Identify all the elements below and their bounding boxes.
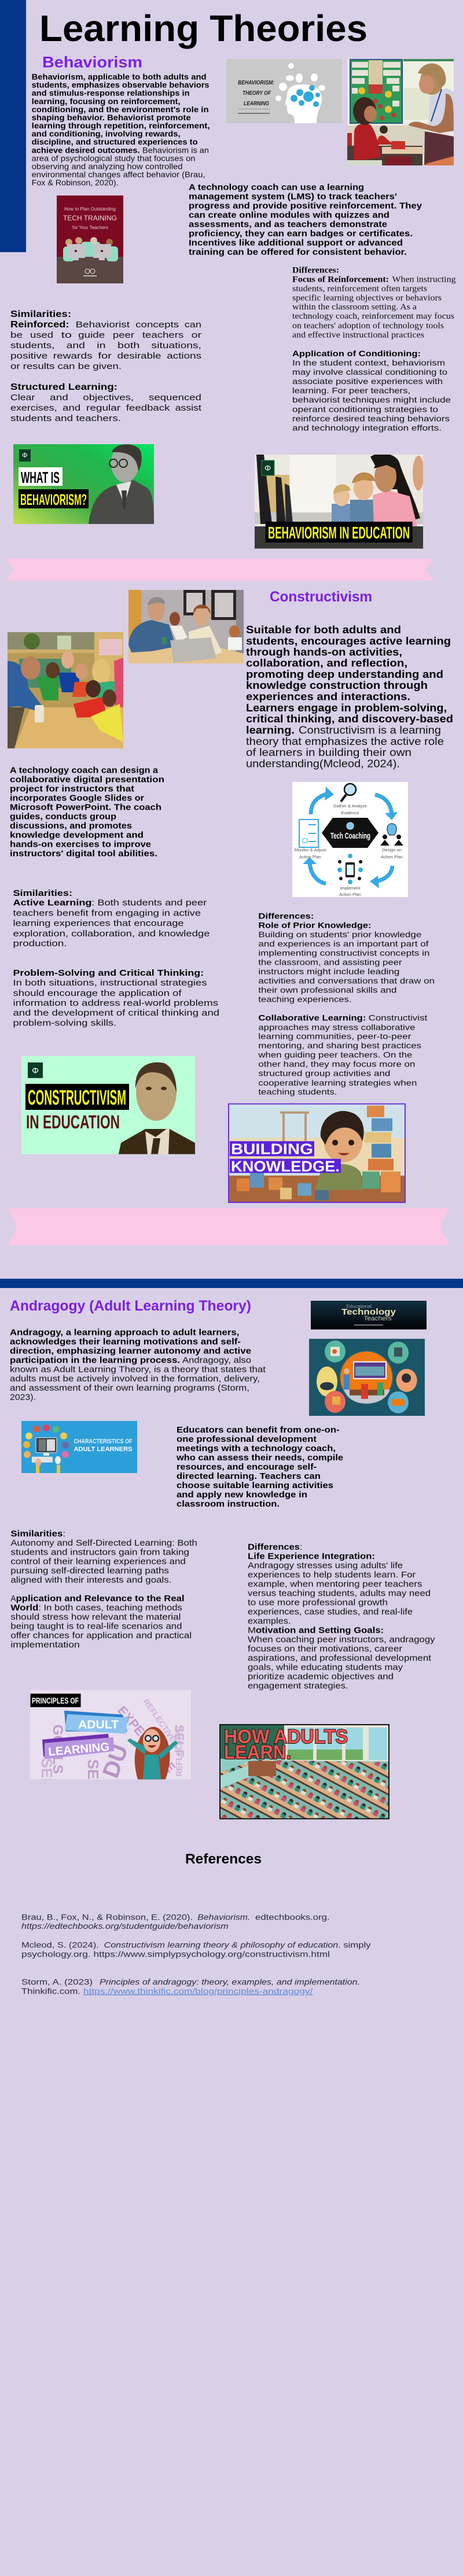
text block: andragogy definition: adults must be actively involved in the formation, delivery, xyxy=(10,1374,260,1383)
diagram: tech coaching cycle xyxy=(292,782,408,897)
text block: behaviorism differences: students, reinforcement often targets xyxy=(292,284,427,293)
text block: andragogy differences: : xyxy=(300,1542,302,1552)
text block: collaborative digital presentation: guides, conducts group xyxy=(10,812,116,822)
text block: andragogy differences: versus teaching students, adults may need xyxy=(248,1589,431,1599)
image: children with teacher at table xyxy=(8,632,123,748)
text block: andragogy differences: examples. xyxy=(248,1617,291,1626)
image: building knowledge xyxy=(228,1104,406,1203)
text block: constructivism similarities: and the development of critical thinking and xyxy=(13,1008,219,1018)
text block: constructivism differences: Role of Prior Knowledge: xyxy=(258,921,371,930)
text block: technology coach LMS: can create online modules with quizzes and xyxy=(189,211,389,220)
image: how adults learn: HOW ADULTS xyxy=(224,1726,348,1748)
text block: constructivism differences: structured group activities and xyxy=(258,1069,390,1078)
image: principles of adult learning: SELF-D xyxy=(84,1759,102,1814)
image: principles of adult learning: REFLECTIVE xyxy=(142,1697,178,1744)
text block: one-on-one professional development: meetings with a technology coach, xyxy=(177,1444,336,1453)
text block: behaviorism differences: When instructing xyxy=(392,275,456,284)
text block: constructivism differences: Constructivist xyxy=(369,1013,427,1023)
text block: behaviorism differences: technology coach, reinforcement may focus xyxy=(292,312,454,321)
text block: behaviorism similarities: used xyxy=(30,330,53,340)
text block: behaviorism definition: Behaviorism is an xyxy=(142,146,209,155)
text block: andragogy definition: participation in the learning process. xyxy=(10,1355,180,1365)
text block: behaviorism definition: achieve desired outcomes. xyxy=(32,146,140,155)
text block: suitable for both adults and students: Learners engage in problem-solving, xyxy=(246,702,447,714)
text block: andragogy definition: acknowledges their learning motivations and self- xyxy=(10,1337,241,1346)
diagram: tech coaching cycle: Action Plan xyxy=(381,854,403,859)
text block: behaviorism similarities: guide xyxy=(78,330,105,340)
text block: constructivism similarities: : Both students and peer xyxy=(91,898,207,908)
text block: collaborative digital presentation: discussions, and promotes xyxy=(10,821,132,831)
image: what is behaviorism: WHAT IS xyxy=(21,468,60,486)
text block: behaviorism differences: Focus of Reinforcement: xyxy=(292,275,389,284)
text block: behaviorism differences: operant conditioning strategies to xyxy=(292,404,438,414)
text block: behaviorism similarities: rewards xyxy=(53,351,93,361)
text block: reference list: . simply xyxy=(338,1940,371,1950)
heading: References: References xyxy=(185,1851,262,1867)
text block: collaborative digital presentation: project for instructors that xyxy=(10,784,134,794)
image: principles of adult learning: DU xyxy=(98,1741,133,1781)
image: what is behaviorism: Φ xyxy=(22,451,28,459)
text block: reference list: psychology.org. https://www.simplypsychology.org/constructivism.html xyxy=(21,1950,330,1959)
text block: andragogy similarities: offer chances for application and practical xyxy=(10,1631,192,1641)
text block: suitable for both adults and students: critical thinking, and discovery-based xyxy=(246,713,453,725)
text block: collaborative digital presentation: collaborative digital presentation xyxy=(10,775,164,785)
text block: reference list: https://edtechbooks.org/studentguide/behaviorism xyxy=(21,1921,229,1931)
text block: andragogy differences: M xyxy=(248,1626,256,1636)
image: principles of adult learning: PRINCIPLES OF xyxy=(32,1696,79,1706)
diagram: tech coaching cycle: Evidence xyxy=(341,810,359,815)
image: tech training book cover: TECH TRAINING xyxy=(63,214,117,222)
text block: behaviorism similarities: for xyxy=(98,351,112,361)
image: what is behaviorism xyxy=(13,444,154,524)
text block: behaviorism similarities: and xyxy=(63,403,80,413)
text block: constructivism differences: and experiences is an important part of xyxy=(258,939,429,949)
text block: reference list: Principles of andragogy: theory, examples, and implementation. xyxy=(100,1977,360,1986)
image: characteristics of adult learners: ADULT LEARNERS xyxy=(74,1446,132,1453)
image: constructivism in education: Φ xyxy=(32,1066,39,1076)
text block: technology coach LMS: proficiency, they can earn badges or certificates. xyxy=(189,229,413,239)
text block: constructivism similarities: should encourage the application of xyxy=(13,988,182,998)
text block: collaborative digital presentation xyxy=(10,766,164,859)
text block: behaviorism definition: and stimulus-response relationships in xyxy=(32,88,190,97)
image: educational technology illustration xyxy=(309,1338,425,1416)
text block: behaviorism similarities: both xyxy=(117,341,139,350)
heading: Behaviorism: Behaviorism xyxy=(42,54,142,71)
text block: reference list: Storm, A. (2023) xyxy=(21,1977,93,1986)
text block: constructivism differences: activities and conversations that draw on xyxy=(258,976,435,985)
text block: andragogy definition: Andragogy, a learning approach to adult learners, xyxy=(10,1327,239,1337)
image: behaviorism in education xyxy=(255,455,423,548)
text block: behaviorism similarities: students, xyxy=(10,341,54,350)
text block: behaviorism similarities: exercises, xyxy=(10,403,57,413)
text block: andragogy similarities: : In both cases, teaching methods xyxy=(38,1603,182,1613)
text block: behaviorism similarities: be xyxy=(10,330,23,340)
text block: constructivism differences: learning communities, peer-to-peer xyxy=(258,1031,411,1040)
text block: constructivism differences: Collaborative Learning: xyxy=(258,1013,366,1023)
image: principles of adult learning: SELF xyxy=(172,1725,186,1757)
text block: andragogy similarities: being taught is to real-life scenarios and xyxy=(10,1622,182,1632)
text block: behaviorism similarities: regular xyxy=(86,403,120,413)
text block: constructivism similarities: exploration, collaboration, and knowledge xyxy=(13,929,210,939)
text block: andragogy definition: 2023). xyxy=(10,1392,36,1402)
text block: suitable for both adults and students: experiences and interactions. xyxy=(246,691,410,703)
text block: andragogy similarities: implementation xyxy=(10,1640,80,1650)
title: Learning Theories xyxy=(39,8,368,49)
diagram: tech coaching cycle: Action Plan xyxy=(339,892,361,897)
text block: constructivism differences xyxy=(258,911,435,1096)
image: constructivism in education: IN EDUCATION xyxy=(26,1112,120,1132)
text block: behaviorism similarities: Reinforced: xyxy=(10,320,69,330)
text block: one-on-one professional development: classroom instruction. xyxy=(177,1499,280,1509)
text block: suitable for both adults and students: learning. xyxy=(246,725,295,736)
text block: constructivism similarities: problem-solving skills. xyxy=(13,1018,116,1028)
image: principles of adult learning: GOALS xyxy=(50,1725,65,1774)
text block: technology coach LMS: A technology coach can use a learning xyxy=(189,183,364,193)
text block: behaviorism differences: and technology integration efforts. xyxy=(292,423,442,433)
image: characteristics of adult learners xyxy=(21,1420,137,1473)
text block: behaviorism differences: associate positive experiences with xyxy=(292,377,443,386)
text block: suitable for both adults and students: through hands-on activities, xyxy=(246,647,402,658)
text block: constructivism similarities: Active Learning xyxy=(13,898,91,908)
text block: reference list: https://www.thinkific.com/blog/principles-andragogy/ xyxy=(83,1986,313,1995)
text block: behaviorism definition: area of psychological study that focuses on xyxy=(32,154,196,163)
text block: constructivism similarities: information to address real-world problems xyxy=(13,998,218,1008)
text block: andragogy similarities: : xyxy=(63,1529,65,1539)
text block: behaviorism definition: learning, focusing on reinforcement, xyxy=(32,97,181,106)
image: principles of adult learning: ADULT xyxy=(78,1719,119,1732)
text block: behaviorism definition: Behaviorism, applicable to both adults and xyxy=(32,72,207,81)
text block: constructivism differences: Differences: xyxy=(258,911,314,920)
text block: andragogy differences: otivation and Setting Goals: xyxy=(256,1626,384,1636)
text block: behaviorism similarities: situations, xyxy=(152,341,201,350)
blue divider band xyxy=(0,1279,463,1288)
text block: constructivism similarities: Similarities: xyxy=(13,888,72,898)
text block: one-on-one professional development xyxy=(176,1425,343,1509)
text block: constructivism differences: instructors might include leading xyxy=(258,966,399,976)
heading: Andragogy: Andragogy (Adult Learning Theory) xyxy=(10,1298,251,1314)
text block: behaviorism differences: In the student context, behaviorism xyxy=(292,358,445,367)
text block: behaviorism differences: learning. For peer teachers, xyxy=(292,386,410,395)
text block: behaviorism differences: Differences: xyxy=(292,266,339,275)
text block: collaborative digital presentation: Microsoft PowerPoint. The coach xyxy=(10,803,161,813)
text block: behaviorism similarities xyxy=(10,309,202,423)
text block: andragogy similarities: A xyxy=(10,1594,16,1604)
image: how adults learn xyxy=(219,1724,389,1820)
ribbon banner 1 xyxy=(6,559,434,581)
diagram: tech coaching cycle: Monitor & Adjust xyxy=(295,847,326,852)
text block: one-on-one professional development: and apply new knowledge in xyxy=(177,1490,307,1500)
text block: behaviorism similarities: actions xyxy=(167,351,201,361)
text block: suitable for both adults and students: knowledge construction through xyxy=(246,680,428,691)
text block: suitable for both adults and students: theory that emphasizes the active role xyxy=(246,736,444,747)
text block: andragogy differences: aspirations, and professional development xyxy=(248,1654,432,1663)
text block: one-on-one professional development: directed learning. Teachers can xyxy=(177,1471,321,1481)
text block: andragogy similarities xyxy=(10,1529,197,1650)
image: principles of adult learning: SELF xyxy=(38,1758,56,1796)
text block: collaborative digital presentation: A technology coach can design a xyxy=(10,766,159,776)
text block: andragogy similarities: students and instructors gain from taking xyxy=(10,1548,189,1558)
image: how adults learn: LEARN. xyxy=(224,1741,291,1763)
text block: andragogy differences xyxy=(248,1542,435,1691)
text block: behaviorism differences: on teachers' adoption of technology tools xyxy=(292,321,444,330)
text block: behaviorism differences xyxy=(292,266,456,433)
text block: andragogy similarities: pursuing self-directed learning paths xyxy=(10,1566,169,1576)
text block: behaviorism differences: behaviorist techniques might include xyxy=(292,395,451,404)
text block: behaviorism similarities: students and teachers. xyxy=(10,414,121,423)
diagram: tech coaching cycle: Tech Coaching xyxy=(330,831,370,841)
text block: constructivism differences: when guiding peer teachers. On the xyxy=(258,1050,413,1060)
text block: behaviorism similarities: Clear xyxy=(10,393,35,403)
text block: andragogy similarities: control of their learning experiences and xyxy=(10,1557,186,1567)
text block: behaviorism similarities: objectives, xyxy=(83,393,134,403)
text block: andragogy definition: Andragogy, also xyxy=(182,1355,251,1365)
image: building knowledge: KNOWLEDGE. xyxy=(231,1158,340,1175)
text block: andragogy differences: When coaching peer instructors, andragogy xyxy=(248,1635,435,1645)
image: behaviorism theory of learning xyxy=(226,59,342,123)
text block: constructivism differences: their own professional skills and xyxy=(258,986,396,995)
text block: andragogy differences: to use more professional growth xyxy=(248,1598,388,1608)
image: behaviorism theory of learning: LEARNING xyxy=(244,101,269,107)
text block: behaviorism similarities: Similarities: xyxy=(10,309,71,319)
text block: reference list: Behaviorism. xyxy=(197,1912,250,1921)
text block: suitable for both adults and students: Constructivism is a learning xyxy=(299,725,441,736)
image: educational technology for teachers: Educational xyxy=(346,1304,372,1309)
text block: andragogy similarities: Autonomy and Self-Directed Learning: Both xyxy=(10,1538,197,1548)
image: principles of adult learning: LEARNING xyxy=(48,1741,110,1759)
text block: behaviorism similarities: and xyxy=(50,393,68,403)
text block: behaviorism definition: learning through repetition, reinforcement, xyxy=(32,121,210,130)
text block: suitable for both adults and students: understanding(Mcleod, 2024). xyxy=(246,758,400,769)
text block: technology coach LMS: Incentives like additional support or advanced xyxy=(189,238,403,248)
text block: reference list xyxy=(21,1912,371,1995)
left blue bar xyxy=(0,0,26,252)
diagram: tech coaching cycle: Action Plan xyxy=(299,854,321,859)
image: behaviorism in education: Φ xyxy=(264,463,271,473)
text block: behaviorism similarities: sequenced xyxy=(149,393,201,403)
image: teacher and student in classroom xyxy=(347,59,454,165)
text block: constructivism similarities: production. xyxy=(13,939,67,949)
text block: andragogy similarities: Similarities xyxy=(10,1529,63,1539)
text block: constructivism differences: approaches may stress collaborative xyxy=(258,1023,416,1032)
text block: constructivism differences: other hand, they may focus more on xyxy=(258,1060,415,1069)
text block: technology coach LMS: management system (LMS) to track teachers' xyxy=(189,192,397,202)
text block: behaviorism differences: specific learning objectives or behaviors xyxy=(292,293,442,302)
text block: constructivism differences: Building on students' prior knowledge xyxy=(258,930,422,939)
text block: andragogy similarities: pplication and Relevance to the Real xyxy=(16,1594,185,1604)
text block: constructivism differences: teaching students. xyxy=(258,1087,337,1096)
text block: one-on-one professional development: who can assess their needs, compile xyxy=(176,1453,343,1463)
text block: andragogy differences: focuses on their motivations, career xyxy=(248,1644,402,1654)
text block: behaviorism definition: students, emphasizes observable behaviors xyxy=(32,80,210,89)
text block: one-on-one professional development: choose suitable learning activities xyxy=(177,1481,333,1490)
image: tech training book cover xyxy=(57,195,123,283)
text block: andragogy definition: known as Adult Learning Theory, is a theory that states that xyxy=(10,1364,266,1374)
text block: behaviorism differences: Application of Conditioning: xyxy=(292,349,421,358)
text block: constructivism similarities: teachers benefit from engaging in active xyxy=(13,908,201,918)
text block: andragogy differences: goals, while educating students may xyxy=(248,1663,403,1673)
image: tech training book cover: How to Plan Outstanding xyxy=(64,206,116,212)
text block: behaviorism definition: Fox & Robinson, 2020). xyxy=(32,178,119,187)
text block: collaborative digital presentation: hands-on exercises to improve xyxy=(10,840,151,850)
text block: andragogy differences: engagement strategies. xyxy=(248,1681,348,1691)
text block: behaviorism similarities: positive xyxy=(10,351,47,361)
text block: suitable for both adults and students: of learners in building their own xyxy=(246,747,411,758)
text block: reference list: Thinkific.com. xyxy=(21,1986,80,1995)
text block: andragogy similarities: aligned with their interests and goals. xyxy=(10,1575,171,1585)
text block: behaviorism similarities: or xyxy=(192,330,201,340)
text block: behaviorism similarities: peer xyxy=(113,330,134,340)
text block: behaviorism similarities: concepts xyxy=(135,320,179,330)
text block: one-on-one professional development: Educators can benefit from one-on- xyxy=(177,1425,340,1435)
text block: suitable for both adults and students: collaboration, and reflection, xyxy=(246,658,407,669)
image: building knowledge: BUILDING xyxy=(231,1141,313,1158)
image: behaviorism theory of learning: BEHAVIORISM: xyxy=(238,80,274,86)
text block: technology coach LMS: progress and provide positive reinforcement. They xyxy=(189,201,422,211)
text block: andragogy definition xyxy=(10,1327,266,1402)
heading: Constructivism: Constructivism xyxy=(270,589,372,605)
image: principles of adult learning: EXPERIENCE xyxy=(115,1703,178,1776)
text block: constructivism differences: implementing constructivist concepts in xyxy=(258,949,429,958)
image: principles of adult learning xyxy=(30,1690,191,1814)
text block: constructivism similarities: In both situations, instructional strategies xyxy=(13,978,207,988)
text block: constructivism similarities: Problem-Solving and Critical Thinking: xyxy=(13,968,204,978)
text block: andragogy definition: direction, emphasizing learner autonomy and active xyxy=(10,1346,251,1356)
text block: one-on-one professional development: one professional development xyxy=(177,1434,317,1444)
text block: suitable for both adults and students: students, encourages active learning xyxy=(246,635,451,647)
image: tech training book cover: for Your Teachers xyxy=(72,225,108,230)
text block: behaviorism similarities: to xyxy=(61,330,72,340)
text block: behaviorism similarities: feedback xyxy=(126,403,170,413)
text block: constructivism differences: the classroom, and assisting peer xyxy=(258,958,402,967)
text block: one-on-one professional development: resources, and encourage self- xyxy=(177,1462,317,1472)
text block: collaborative digital presentation: incorporates Google Slides or xyxy=(10,794,144,803)
text block: reference list: edtechbooks.org. xyxy=(255,1912,330,1921)
text block: behaviorism definition xyxy=(32,72,210,187)
text block: constructivism differences: teaching experiences. xyxy=(258,995,351,1004)
text block: andragogy differences: Life Experience Integration: xyxy=(248,1552,375,1562)
image: educational technology for teachers: Technology xyxy=(341,1307,396,1317)
image: behaviorism theory of learning: THEORY OF xyxy=(242,90,271,97)
text block: suitable for both adults and students: promoting deep understanding and xyxy=(246,669,443,680)
text block: behaviorism differences: may involve classical conditioning to xyxy=(292,367,447,377)
text block: behaviorism similarities: in xyxy=(97,341,106,350)
text block: technology coach LMS: training can be offered for consistent behavior. xyxy=(189,248,407,257)
text block: constructivism differences: cooperative learning strategies when xyxy=(258,1078,417,1087)
text block: behaviorism differences: within the classroom setting. As a xyxy=(292,302,417,312)
text block: collaborative digital presentation: instructors' digital tool abilities. xyxy=(10,849,157,859)
text block: behaviorism similarities: or results can be given. xyxy=(10,361,122,371)
text block: behaviorism definition: discipline, and structured experiences to xyxy=(32,137,198,146)
text block: suitable for both adults and students: Suitable for both adults and xyxy=(246,624,401,636)
text block: behaviorism similarities: teachers xyxy=(142,330,183,340)
text block: behaviorism similarities: and xyxy=(67,341,85,350)
text block: behaviorism definition: observing and analyzing how controlled xyxy=(32,162,183,171)
text block: reference list: Constructivism learning theory & philosophy of education xyxy=(104,1940,338,1950)
text block: behaviorism definition: environmental changes affect behavior (Brau, xyxy=(32,170,205,179)
image: principles of adult learning: REFLECTIVE xyxy=(174,1726,183,1777)
text block: constructivism similarities: learning experiences that encourage xyxy=(13,918,184,928)
ribbon banner 2 xyxy=(8,1208,449,1245)
text block: andragogy differences: prioritize academic objectives and xyxy=(248,1672,394,1682)
text block: andragogy similarities: should stress how relevant the material xyxy=(10,1612,181,1622)
text block: andragogy differences: experiences to help students learn. For xyxy=(248,1570,416,1580)
text block: behaviorism definition: and conditioning, involving rewards, xyxy=(32,129,181,138)
text block: behaviorism similarities: Behaviorist xyxy=(76,320,130,330)
text block: behaviorism definition: shaping behavior. Behaviorist promote xyxy=(32,113,191,122)
text block: behaviorism similarities: assist xyxy=(175,403,202,413)
diagram: tech coaching cycle: Gather & Analyze xyxy=(333,803,367,809)
image: constructivism in education xyxy=(21,1056,195,1154)
text block: behaviorism differences: and effective instructional practices xyxy=(292,330,424,339)
text block: behaviorism similarities: desirable xyxy=(117,351,161,361)
image: educational technology for teachers: Teachers xyxy=(364,1315,392,1322)
text block: technology coach LMS xyxy=(189,183,422,257)
text block: reference list: Brau, B., Fox, N., & Robinson, E. (2020). xyxy=(21,1912,193,1921)
text block: behaviorism similarities: can xyxy=(185,320,201,330)
text block: andragogy definition: and assessment of their own learning programs (Storm, xyxy=(10,1383,249,1393)
diagram: tech coaching cycle: Design an xyxy=(382,847,402,852)
text block: andragogy differences: Differences xyxy=(248,1542,300,1552)
image: what is behaviorism: BEHAVIORISM? xyxy=(20,491,87,508)
text block: andragogy differences: example, when mentoring peer teachers xyxy=(248,1579,422,1589)
text block: reference list: Mcleod, S. (2024). xyxy=(21,1940,99,1950)
image: educational technology for teachers xyxy=(311,1301,427,1330)
text block: behaviorism differences: reinforce desired teaching behaviors xyxy=(292,414,450,423)
text block: andragogy differences: Andragogy stresses using adults' life xyxy=(248,1561,403,1571)
text block: behaviorism definition: conditioning, and the environment's role in xyxy=(32,105,209,114)
diagram: tech coaching cycle: Implement xyxy=(340,885,361,891)
text block: andragogy similarities: World xyxy=(10,1603,38,1613)
text block: constructivism similarities xyxy=(13,888,219,1028)
text block: behaviorism similarities: Structured Learning: xyxy=(10,382,117,392)
image: adults with laptop xyxy=(128,590,244,663)
text block: collaborative digital presentation: knowledge development and xyxy=(10,831,144,840)
text block: technology coach LMS: assessments, and as teachers demonstrate xyxy=(189,220,387,230)
text block: andragogy differences: experiences, case studies, and real-life xyxy=(248,1607,413,1617)
text block: suitable for both adults and students xyxy=(246,624,453,769)
text block: constructivism differences: mentoring, and sharing best practices xyxy=(258,1041,421,1050)
